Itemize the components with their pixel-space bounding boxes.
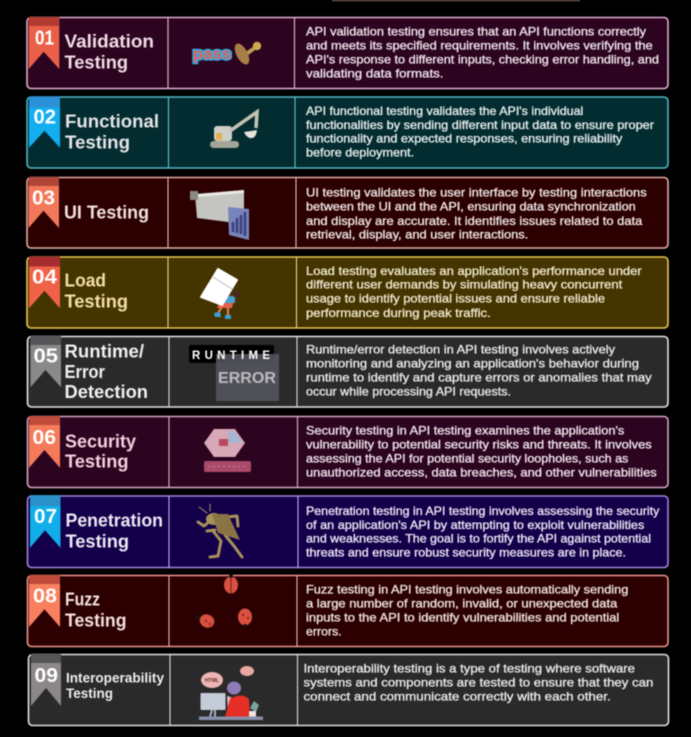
- ribbon badge 07: 07: [34, 506, 57, 528]
- ribbon badge 03: [28, 177, 59, 228]
- text: penetration description: [306, 504, 659, 560]
- text: fuzz description: [306, 582, 628, 638]
- text: ui description: and display are accurate. It identifies issues related to data: [306, 214, 643, 228]
- heading: fuzz testing: Fuzz: [65, 588, 100, 609]
- text: penetration description: Penetration testing in API testing involves assessing the security: [306, 504, 659, 518]
- text: validation description: API validation testing ensures that an API functions correctly: [306, 25, 646, 39]
- text: security description: Security testing in API testing examines the application's: [306, 424, 624, 438]
- ribbon badge 05: 05: [34, 345, 58, 367]
- heading: functional testing: [65, 111, 159, 152]
- heading: fuzz testing: [65, 588, 126, 630]
- text: ui description: retrieval, display, and user interactions.: [306, 228, 528, 242]
- panel: 05 runtime error detection: [28, 336, 668, 407]
- heading: interoperability testing: [66, 671, 164, 701]
- text: interoperability description: connect and communicate correctly with each other.: [304, 690, 611, 704]
- heading: load testing: Testing: [64, 290, 128, 311]
- text: runtime description: [306, 342, 652, 398]
- icon: pass stamp: [193, 41, 261, 67]
- text: security description: [306, 424, 657, 480]
- heading: load testing: Load: [64, 270, 106, 291]
- panel: 08 fuzz testing: [28, 574, 668, 647]
- text: security description: assessing the API for potential security loopholes, such as: [306, 452, 628, 466]
- heading: security testing: Security: [65, 430, 137, 451]
- icon: security shield and bar: [204, 429, 251, 472]
- text: penetration description: of an application's API by attempting to exploit vulnerabilities: [306, 518, 644, 532]
- text: interoperability description: systems and components are tested to ensure that they can: [304, 676, 653, 690]
- icon: excavator: [210, 112, 257, 148]
- icon: cockroach bug: [198, 504, 242, 557]
- icon: runtime and error labels: [189, 345, 279, 401]
- panel: 03 ui testing: [27, 177, 668, 248]
- text: validation description: [306, 25, 659, 80]
- ribbon badge 04: [29, 256, 60, 308]
- icon: developer at computer: HTML: [205, 678, 220, 684]
- icon: runtime and error labels: ERROR: [218, 370, 276, 387]
- text: load description: usage to identify potential issues and ensure reliable: [306, 292, 605, 306]
- text: penetration description: threats and ensure robust security measures are in place.: [306, 546, 626, 560]
- heading: interoperability testing: Interoperability: [66, 671, 164, 686]
- text: load description: performance during peak traffic.: [306, 306, 491, 320]
- text: ui description: UI testing validates the user interface by testing interactions: [306, 186, 647, 200]
- text: load description: [306, 264, 642, 320]
- text: penetration description: and weaknesses. The goal is to fortify the API against potential: [306, 532, 651, 546]
- heading: validation testing: Testing: [64, 51, 128, 72]
- panel: 09 interoperability testing: [28, 654, 668, 726]
- icon: ui windows and chart: [190, 190, 249, 240]
- icon: person carrying fridge: [201, 269, 240, 319]
- icon: ladybugs: [195, 574, 252, 630]
- heading: validation testing: [64, 31, 154, 72]
- icon: pass stamp: pass: [193, 46, 231, 63]
- panel: 02 functional testing: [27, 96, 668, 168]
- ribbon badge 01: [29, 17, 59, 69]
- panel: 04 load testing: [27, 256, 668, 328]
- text: validation description: and meets its specified requirements. It involves verifying the: [306, 38, 653, 52]
- heading: load testing: [64, 270, 128, 311]
- heading: runtime error detection: Runtime/: [64, 340, 144, 361]
- ribbon badge 04: 04: [32, 266, 58, 288]
- text: interoperability description: [304, 661, 653, 704]
- heading: runtime error detection: Detection: [64, 381, 148, 402]
- heading: security testing: Testing: [65, 450, 128, 471]
- heading: functional testing: Testing: [65, 131, 130, 152]
- ribbon badge 09: 09: [34, 665, 58, 687]
- ribbon badge 08: 08: [33, 586, 57, 608]
- heading: penetration testing: Testing: [66, 531, 129, 552]
- text: fuzz description: errors.: [306, 624, 342, 638]
- text: runtime description: monitoring and analyzing an application's behavior during: [306, 356, 639, 370]
- panel: 06 security testing: [28, 416, 668, 488]
- heading: penetration testing: Penetration: [66, 509, 163, 530]
- panel: 01 validation testing: [27, 17, 668, 88]
- icon: runtime and error labels: RUNTIME: [192, 350, 270, 362]
- ribbon badge 09: [31, 654, 61, 706]
- heading: runtime error detection: [64, 340, 148, 402]
- heading: validation testing: Validation: [64, 31, 154, 52]
- heading: ui testing: UI Testing: [64, 201, 149, 222]
- ribbon badge 05: [30, 336, 61, 387]
- text: functional description: [306, 104, 654, 160]
- ribbon badge 03: 03: [32, 187, 55, 209]
- ribbon badge 06: [29, 416, 60, 468]
- ribbon badge 07: [30, 495, 60, 548]
- ribbon badge 02: [29, 96, 60, 148]
- icon: developer at computer: [199, 666, 263, 720]
- text: ui description: between the UI and the API, ensuring data synchronization: [306, 200, 636, 214]
- text: functional description: API functional testing validates the API's individual: [306, 104, 583, 118]
- text: functional description: functionalities by sending different input data to ensure proper: [306, 118, 654, 132]
- text: interoperability description: Interoperability testing is a type of testing where software: [304, 661, 635, 675]
- ribbon badge 06: 06: [32, 427, 56, 449]
- heading: penetration testing: [66, 509, 163, 552]
- ribbon badge 02: 02: [34, 107, 56, 129]
- text: load description: different user demands by simulating heavy concurrent: [306, 278, 623, 292]
- text: validation description: API's response to different inputs, checking error handling, and: [306, 52, 659, 66]
- text: runtime description: occur while processing API requests.: [306, 384, 511, 398]
- text: ui description: [306, 186, 647, 242]
- text: load description: Load testing evaluates an application's performance under: [306, 264, 642, 278]
- text: runtime description: runtime to identify and capture errors or anomalies that may: [306, 370, 652, 384]
- heading: security testing: [65, 430, 137, 471]
- text: security description: unauthorized access, data breaches, and other vulnerabilities: [306, 466, 657, 480]
- text: security description: vulnerability to potential security risks and threats. It involves: [306, 438, 652, 452]
- heading: interoperability testing: Testing: [66, 686, 113, 701]
- heading: runtime error detection: Error: [64, 361, 105, 382]
- text: fuzz description: inputs to the API to identify vulnerabilities and potential: [306, 610, 619, 624]
- text: validation description: validating data formats.: [306, 66, 444, 80]
- heading: functional testing: Functional: [65, 111, 159, 132]
- text: functional description: before deployment.: [306, 146, 414, 160]
- text: runtime description: Runtime/error detection in API testing involves actively: [306, 342, 615, 356]
- text: fuzz description: a large number of random, invalid, or unexpected data: [306, 596, 618, 610]
- text: functional description: functionality and expected responses, ensuring reliability: [306, 132, 622, 146]
- ribbon badge 01: 01: [35, 27, 54, 49]
- text: fuzz description: Fuzz testing in API testing involves automatically sending: [306, 582, 628, 596]
- panel: 07 penetration testing: [28, 495, 668, 568]
- ribbon badge 08: [29, 575, 60, 627]
- heading: fuzz testing: Testing: [65, 609, 126, 630]
